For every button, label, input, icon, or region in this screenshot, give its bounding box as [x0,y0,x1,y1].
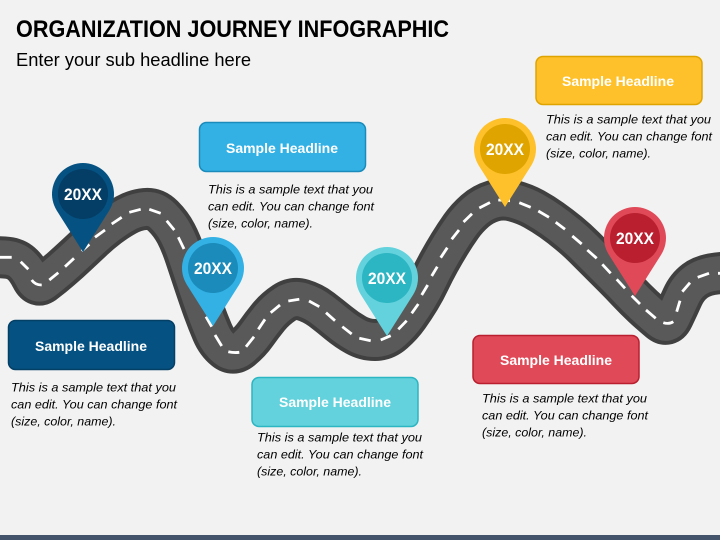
panel: teal milestone [252,378,424,478]
panel: dark blue milestone: Sample Headline [35,338,147,354]
panel: yellow milestone [536,56,713,160]
panel: yellow milestone: can edit. You can change font [546,130,713,144]
panel: yellow milestone: This is a sample text that you [546,112,711,126]
panel: teal milestone: This is a sample text that you [257,430,422,444]
panel: red milestone [473,336,649,440]
pin 1: dark blue [52,163,114,252]
panel: yellow milestone: Sample Headline [562,73,674,89]
panel: light blue milestone [200,122,375,230]
panel: teal milestone: (size, color, name). [257,464,362,478]
pin 3: teal [356,247,418,336]
pin 3: teal: 20XX [368,269,407,288]
pin 4: yellow: 20XX [486,140,525,159]
panel: yellow milestone: (size, color, name). [546,146,651,160]
panel: dark blue milestone: (size, color, name). [11,414,116,428]
panel: teal milestone: can edit. You can change font [257,448,424,462]
panel: light blue milestone: (size, color, name). [208,216,313,230]
subtitle: Enter your sub headline here [16,50,251,70]
pin 5: red [604,207,666,296]
panel: teal milestone: Sample Headline [279,394,391,410]
pin 2: light blue: 20XX [194,259,233,278]
pin 4: yellow [474,118,536,207]
panel: light blue milestone: This is a sample text that you [208,182,373,196]
title: ORGANIZATION JOURNEY INFOGRAPHIC [16,16,449,43]
pin 5: red: 20XX [616,229,655,248]
winding road [0,200,720,353]
panel: red milestone: Sample Headline [500,352,612,368]
pin 2: light blue [182,237,244,326]
panel: red milestone: (size, color, name). [482,426,587,440]
bottom bar [0,535,720,540]
panel: dark blue milestone [8,320,178,428]
pin 1: dark blue: 20XX [64,185,103,204]
panel: dark blue milestone: can edit. You can change font [11,398,178,412]
panel: light blue milestone: Sample Headline [226,140,338,156]
panel: red milestone: can edit. You can change font [482,408,649,422]
panel: red milestone: This is a sample text that you [482,392,647,406]
panel: dark blue milestone: This is a sample text that you [11,380,176,394]
panel: light blue milestone: can edit. You can change font [208,200,375,214]
